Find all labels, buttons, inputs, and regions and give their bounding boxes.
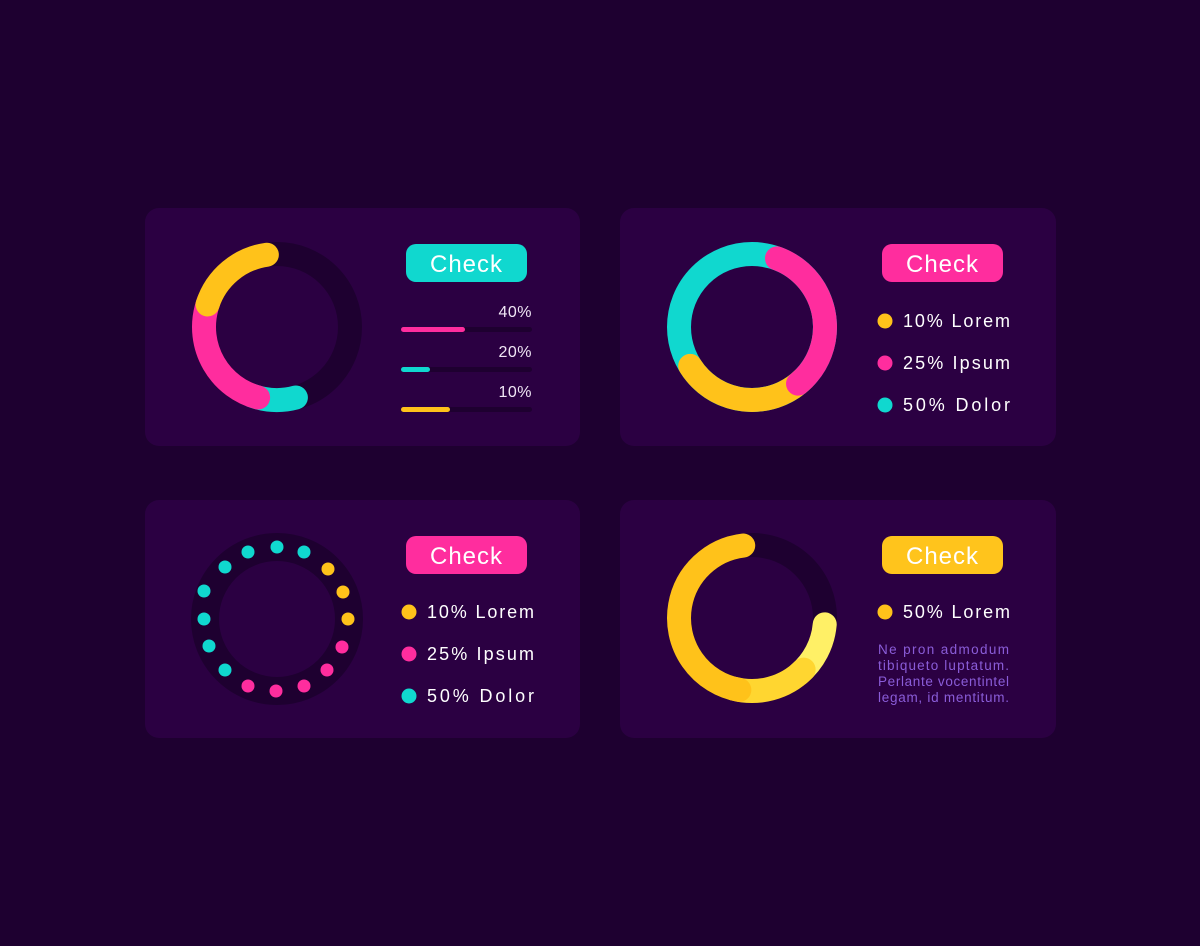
- progress bars: 20%: [498, 344, 532, 361]
- button: Check pink: [406, 536, 527, 574]
- button: Check yellow: Check: [906, 543, 979, 570]
- legend: 50% Dolor: [427, 686, 534, 706]
- text block: description: tibiqueto luptatum.: [878, 658, 1009, 673]
- text block: description: Ne pron admodum: [878, 642, 1009, 657]
- dotted ring chart: [198, 540, 354, 698]
- text block: description: Perlante vocentintel: [878, 674, 1009, 689]
- button: Check pink: [882, 244, 1003, 282]
- legend: 25% Ipsum: [427, 644, 534, 664]
- progress bars: [401, 304, 532, 412]
- legend: 50% Lorem: [903, 602, 1010, 622]
- donut chart: yellow shades: [649, 515, 855, 721]
- panel: top-left bar chart card: [145, 208, 580, 446]
- panel: bottom-right yellow donut card: [620, 500, 1056, 738]
- donut chart: three segments: [185, 235, 369, 419]
- button: Check cyan: [406, 244, 527, 282]
- panel: top-right legend card: [620, 208, 1056, 446]
- legend: 10% Lorem: [903, 311, 1010, 331]
- button: Check cyan: Check: [430, 251, 503, 278]
- donut chart: full ring: [649, 224, 855, 430]
- legend: 25% Ipsum: [903, 353, 1010, 373]
- legend: [402, 602, 534, 706]
- panel: bottom-left dotted ring card: [145, 500, 580, 738]
- progress bars: 10%: [498, 384, 532, 401]
- legend: 10% Lorem: [427, 602, 534, 622]
- text block: description: legam, id mentitum.: [878, 690, 1009, 705]
- progress bars: 40%: [498, 304, 532, 321]
- legend: [878, 311, 1010, 415]
- button: Check pink: Check: [430, 543, 503, 570]
- button: Check yellow: [882, 536, 1003, 574]
- text block: description: [878, 642, 1009, 705]
- button: Check pink: Check: [906, 251, 979, 278]
- legend: 50% Dolor: [903, 395, 1010, 415]
